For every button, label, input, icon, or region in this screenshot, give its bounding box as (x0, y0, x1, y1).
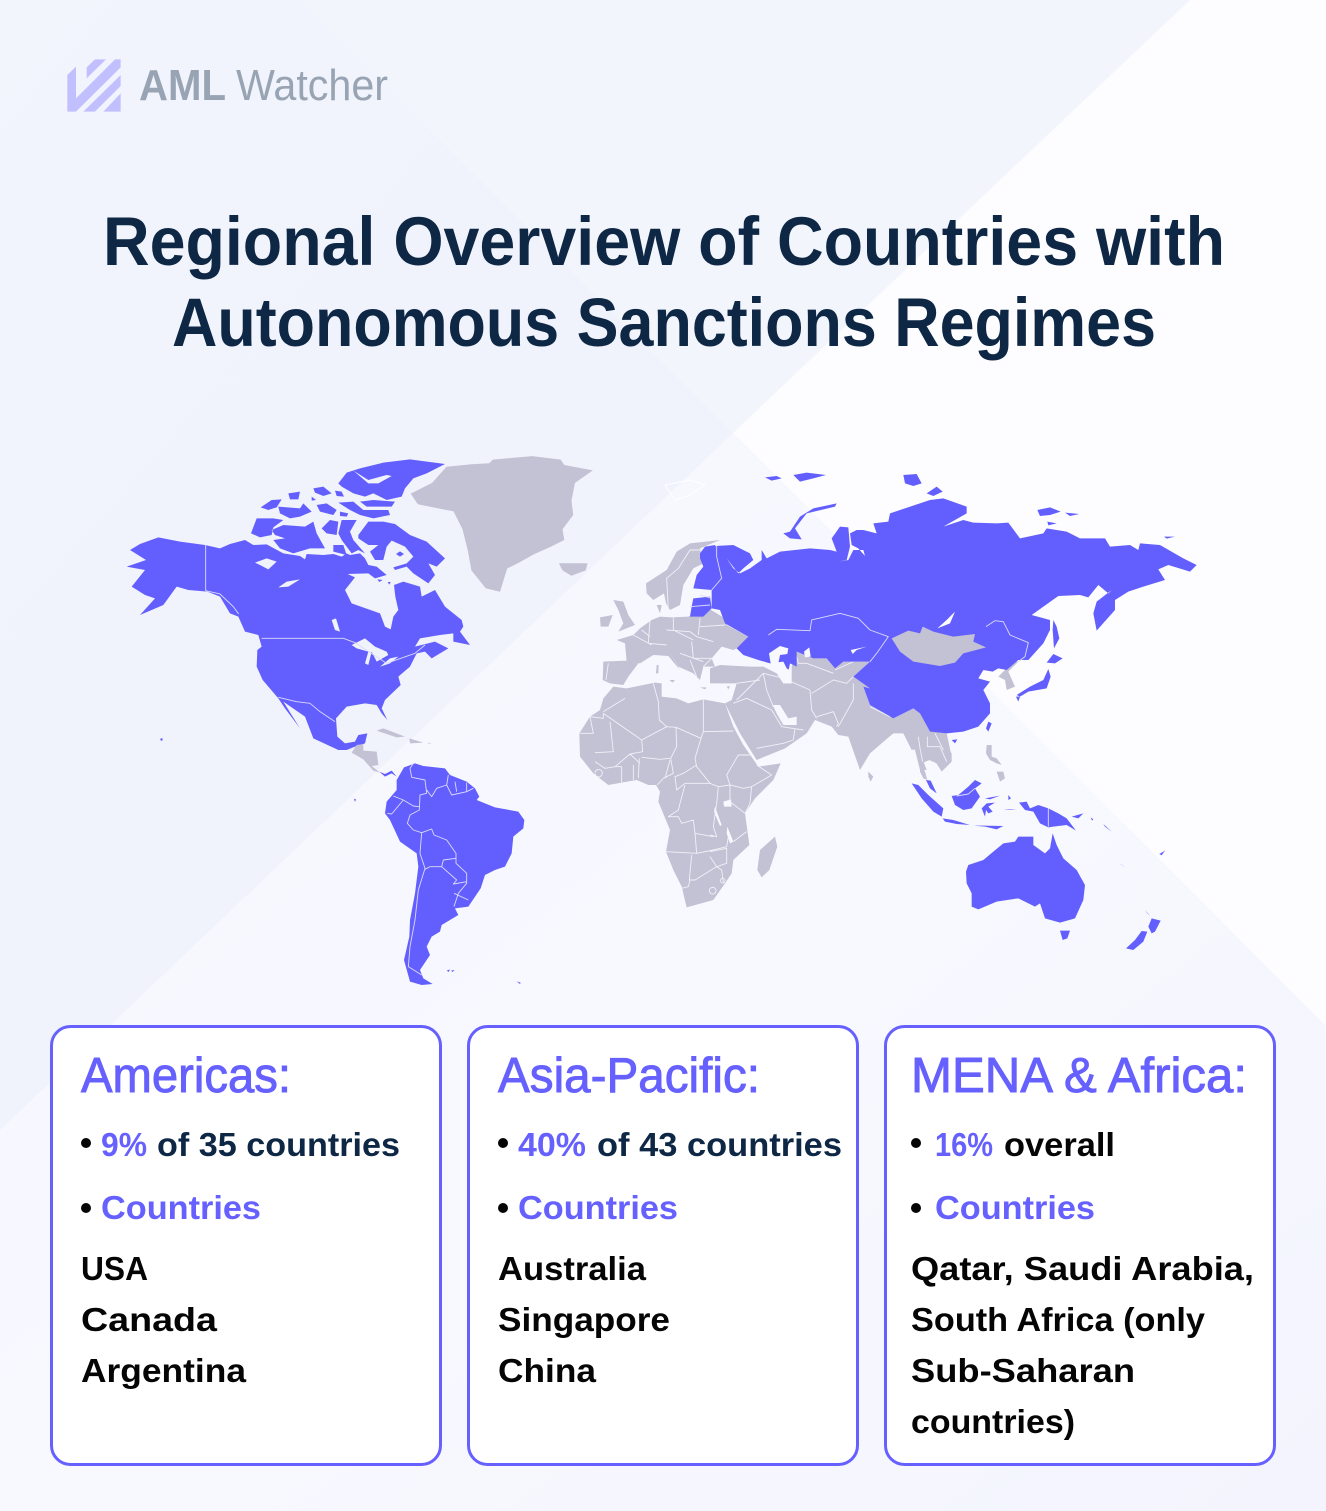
heading: Americas: Americas: (81, 1049, 291, 1103)
panel: Asia-Pacific (468, 1026, 858, 1464)
Greenland and Iceland (411, 456, 593, 592)
country list: Argentina (81, 1352, 247, 1389)
heading: Asia-Pacific: Asia-Pacific: (498, 1049, 760, 1103)
Europe and Scandinavia (600, 540, 748, 689)
title: Regional Overview of Countries with (103, 203, 1225, 280)
stat: 9% of 35 countries: of 35 countries (157, 1126, 400, 1163)
country list: USA (81, 1250, 148, 1287)
Central and South America (352, 728, 524, 985)
Southeast Asia, Australia and Oceania (868, 730, 1165, 950)
Asia and Europe country borders (606, 550, 890, 748)
subheading: Countries: Countries (518, 1189, 678, 1226)
Hawaii (160, 738, 163, 741)
logo: AML Watcher (67, 59, 388, 112)
country list: Sub-Saharan (911, 1352, 1135, 1389)
country list: Canada (81, 1301, 218, 1338)
icon: striped logo mark (67, 59, 121, 112)
stat: 40% of 43 countries (498, 1126, 842, 1163)
Russian islands, Sakhalin, Japan, Taiwan, Hainan (765, 473, 1175, 743)
country list: Qatar, Saudi Arabia, (911, 1250, 1254, 1287)
country list: Australia (498, 1250, 647, 1287)
stat: 40% of 43 countries: of 43 countries (597, 1126, 842, 1163)
Svalbard outline (665, 480, 705, 500)
country list: Singapore (498, 1301, 670, 1338)
title: Autonomous Sanctions Regimes (172, 284, 1156, 361)
stat: 40% of 43 countries: 40% (518, 1126, 586, 1163)
panel: MENA and Africa (886, 1026, 1274, 1464)
country list (911, 1250, 1254, 1440)
country list: China (498, 1352, 597, 1389)
country list (81, 1250, 247, 1389)
Mongolia (892, 627, 986, 666)
heading: MENA and Africa: MENA & Africa: (911, 1049, 1247, 1103)
stat: 16% overall (911, 1126, 1115, 1163)
North America: Canada, USA, Mexico (127, 459, 470, 750)
stat: 16% overall: 16% (935, 1126, 993, 1163)
title (103, 203, 1225, 361)
subheading: Countries: Countries (935, 1189, 1095, 1226)
subheading: Countries: Countries (101, 1189, 261, 1226)
New Zealand (1126, 910, 1161, 950)
country list: countries) (911, 1403, 1075, 1440)
logo wordmark AML: AML (139, 61, 226, 110)
panel: Americas (52, 1026, 440, 1464)
Africa and Madagascar (579, 683, 781, 907)
country list (498, 1250, 670, 1389)
Finland and Baltic states (690, 545, 722, 617)
stat: 9% of 35 countries: 9% (101, 1126, 147, 1163)
Australia (966, 833, 1085, 940)
Middle East, South and Southeast Asia (710, 652, 1018, 770)
Russia, Kazakhstan, China and Finland (690, 473, 1197, 743)
Canadian Arctic islands (251, 459, 445, 585)
logo wordmark Watcher: Watcher (236, 61, 388, 110)
country list: South Africa (only (911, 1301, 1206, 1338)
stat: 16% overall: overall (1004, 1126, 1115, 1163)
Caspian and Aral seas (769, 646, 811, 683)
world map (127, 456, 1197, 985)
